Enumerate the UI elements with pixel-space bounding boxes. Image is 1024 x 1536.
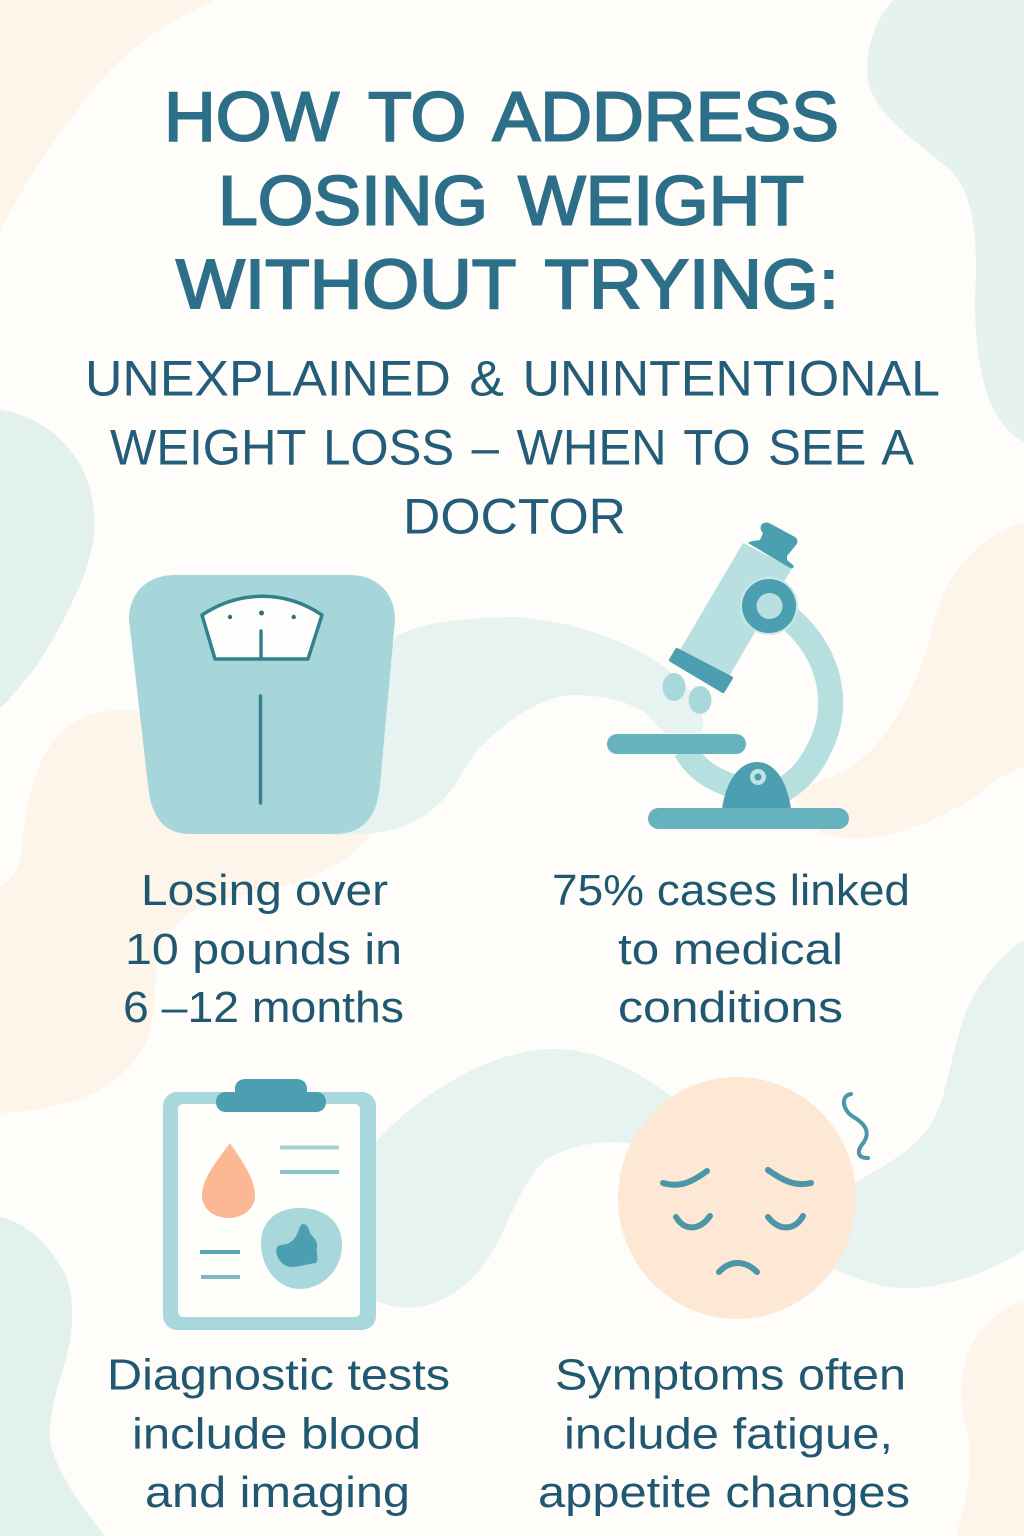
title: LOSING WEIGHT [218, 162, 804, 240]
text: 75% cases: conditions [618, 983, 843, 1032]
microscope base [648, 808, 849, 829]
right eye [768, 1216, 803, 1227]
text: diagnostic tests: include blood [132, 1410, 421, 1458]
text: diagnostic tests: Diagnostic tests [107, 1350, 450, 1400]
icon: clipboard [163, 1079, 376, 1330]
left brow [663, 1171, 707, 1185]
scale needle [259, 631, 263, 659]
text: symptoms: Symptoms often [555, 1350, 906, 1400]
imaging scan [261, 1208, 342, 1289]
icon: microscope [607, 522, 849, 829]
text: 75% cases: to medical [618, 925, 843, 974]
microscope dome [722, 762, 791, 809]
microscope arm [770, 615, 831, 797]
scale center line [259, 696, 262, 803]
microscope stage [607, 734, 746, 754]
title [164, 78, 839, 323]
microscope tube [680, 543, 792, 675]
icon: tired face [618, 1077, 868, 1319]
subtitle: DOCTOR [403, 488, 626, 544]
text: 75% cases: 75% cases linked [552, 866, 910, 915]
microscope lower arm [685, 750, 732, 786]
text: symptoms [538, 1350, 910, 1517]
report lines [200, 1148, 339, 1277]
text: symptoms: include fatigue, [564, 1410, 893, 1458]
microscope nosepiece [671, 650, 731, 691]
text: 75% cases [552, 866, 910, 1032]
mouth [719, 1263, 757, 1272]
clipboard clip [216, 1079, 326, 1112]
imaging scan organ [276, 1224, 317, 1267]
scale dial window [202, 596, 322, 659]
microscope objectives [662, 673, 686, 701]
microscope eyepiece [748, 522, 797, 568]
microscope focus knob [740, 577, 798, 635]
left eye [676, 1216, 710, 1227]
text: symptoms: appetite changes [538, 1468, 910, 1517]
icon: bathroom scale [129, 575, 395, 834]
text: losing over 10 pounds: Losing over [141, 866, 388, 915]
text: losing over 10 pounds: 10 pounds in [125, 925, 402, 974]
right brow [768, 1170, 811, 1184]
title: HOW TO ADDRESS [164, 78, 839, 156]
subtitle [85, 350, 940, 544]
microscope dome knob [750, 769, 766, 785]
subtitle: UNEXPLAINED & UNINTENTIONAL [85, 350, 940, 406]
title: WITHOUT TRYING: [176, 245, 839, 323]
text: losing over 10 pounds [123, 866, 404, 1032]
text: losing over 10 pounds: 6 –12 months [123, 983, 404, 1032]
text: diagnostic tests [107, 1350, 450, 1517]
scale dial ticks [228, 610, 296, 619]
blood drop [202, 1143, 255, 1218]
subtitle: WEIGHT LOSS – WHEN TO SEE A [110, 420, 915, 476]
squiggle [844, 1094, 868, 1158]
text: diagnostic tests: and imaging [145, 1468, 410, 1517]
